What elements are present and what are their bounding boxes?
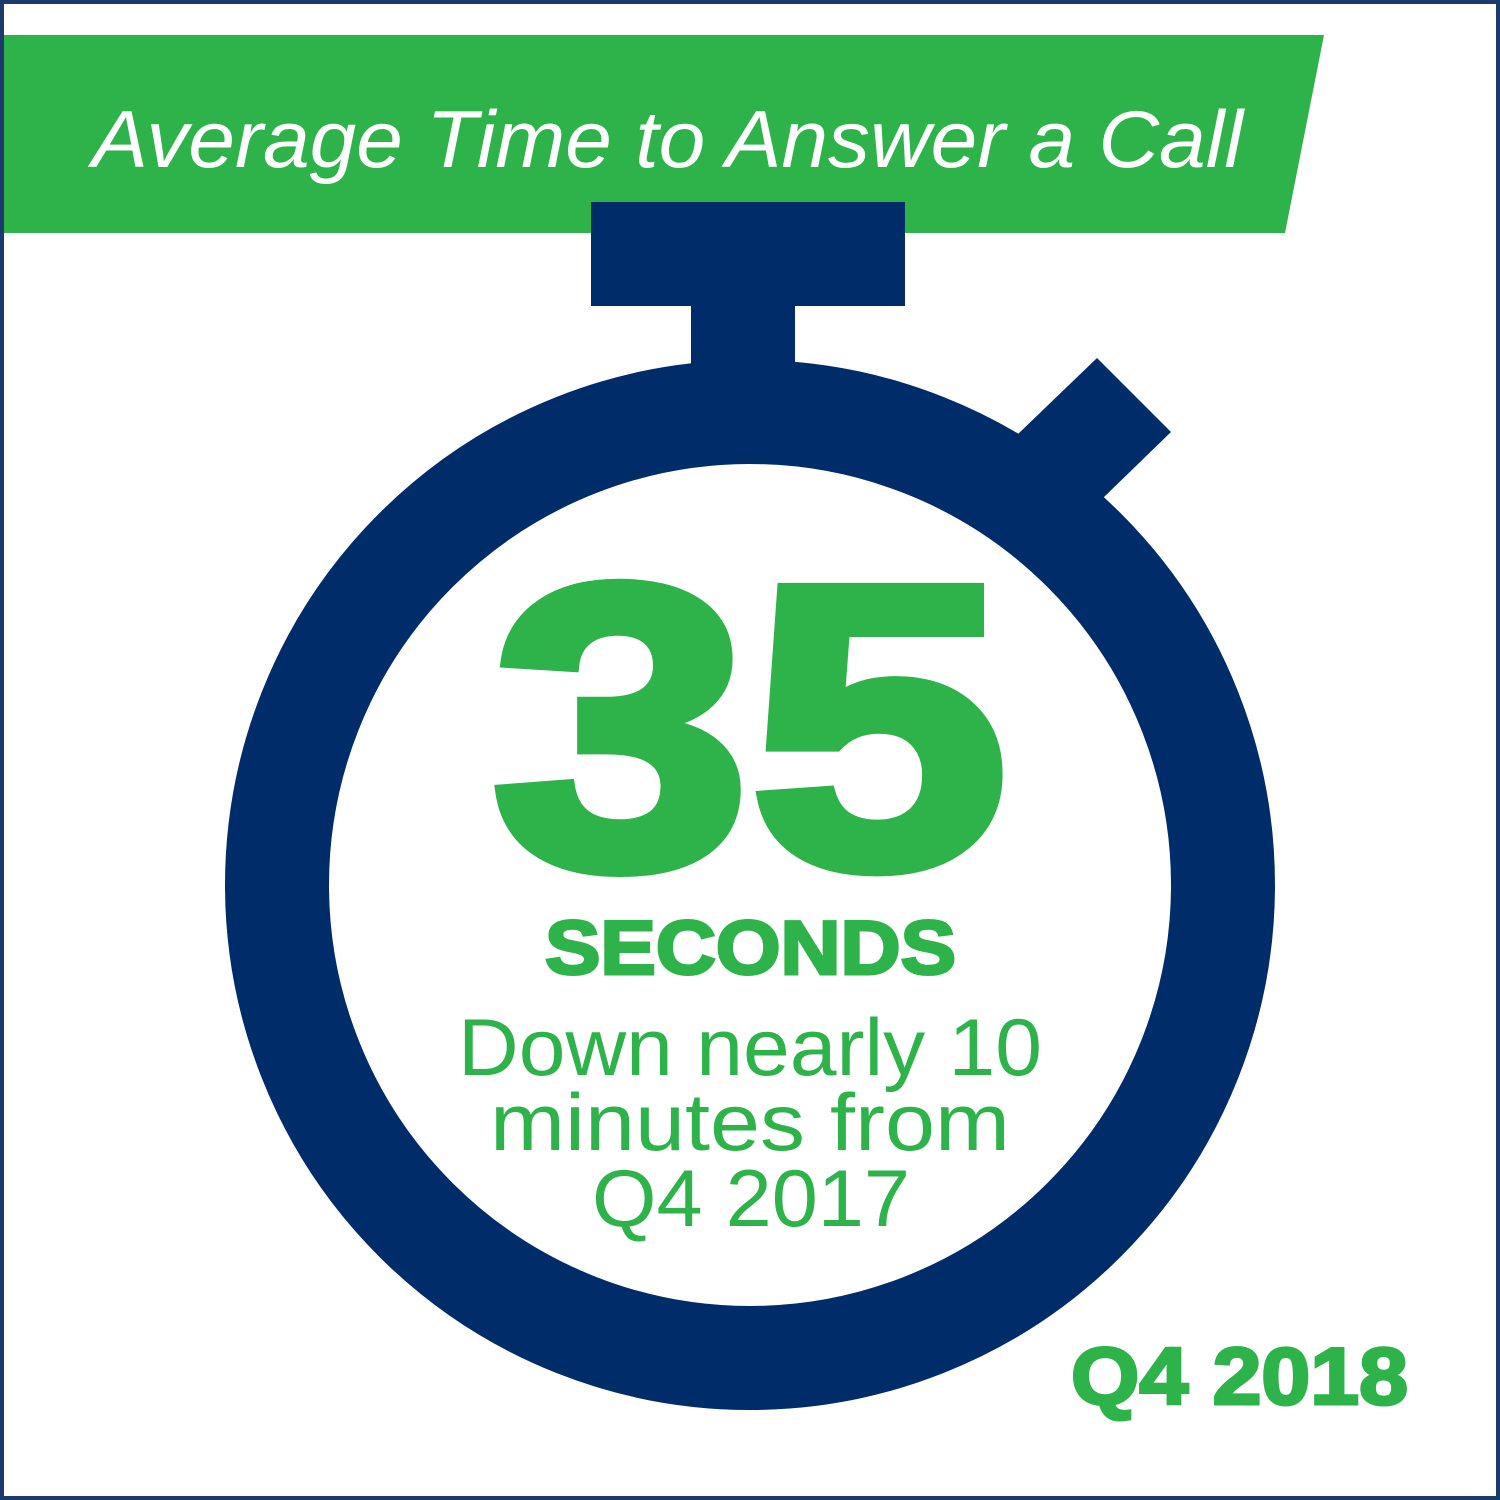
stopwatch top cap <box>591 202 905 306</box>
stopwatch stem <box>691 305 795 405</box>
icon: stopwatch <box>277 202 1223 1358</box>
line 1: Down nearly 10 <box>458 1003 1042 1093</box>
label: seconds: SECONDS <box>545 906 956 991</box>
stopwatch ring <box>277 412 1223 1358</box>
date label: Q4 2018: Q4 2018 <box>1071 1332 1408 1422</box>
line 3: Q4 2017 <box>592 1154 910 1244</box>
banner: green title ribbon <box>4 35 1324 233</box>
big number: 35: 35 <box>492 503 1008 952</box>
line 2: minutes from <box>490 1078 1010 1168</box>
text block: comparison to prior year <box>458 1003 1042 1244</box>
title: Average Time to Answer a Call <box>88 95 1245 185</box>
stopwatch side button <box>1018 358 1171 500</box>
